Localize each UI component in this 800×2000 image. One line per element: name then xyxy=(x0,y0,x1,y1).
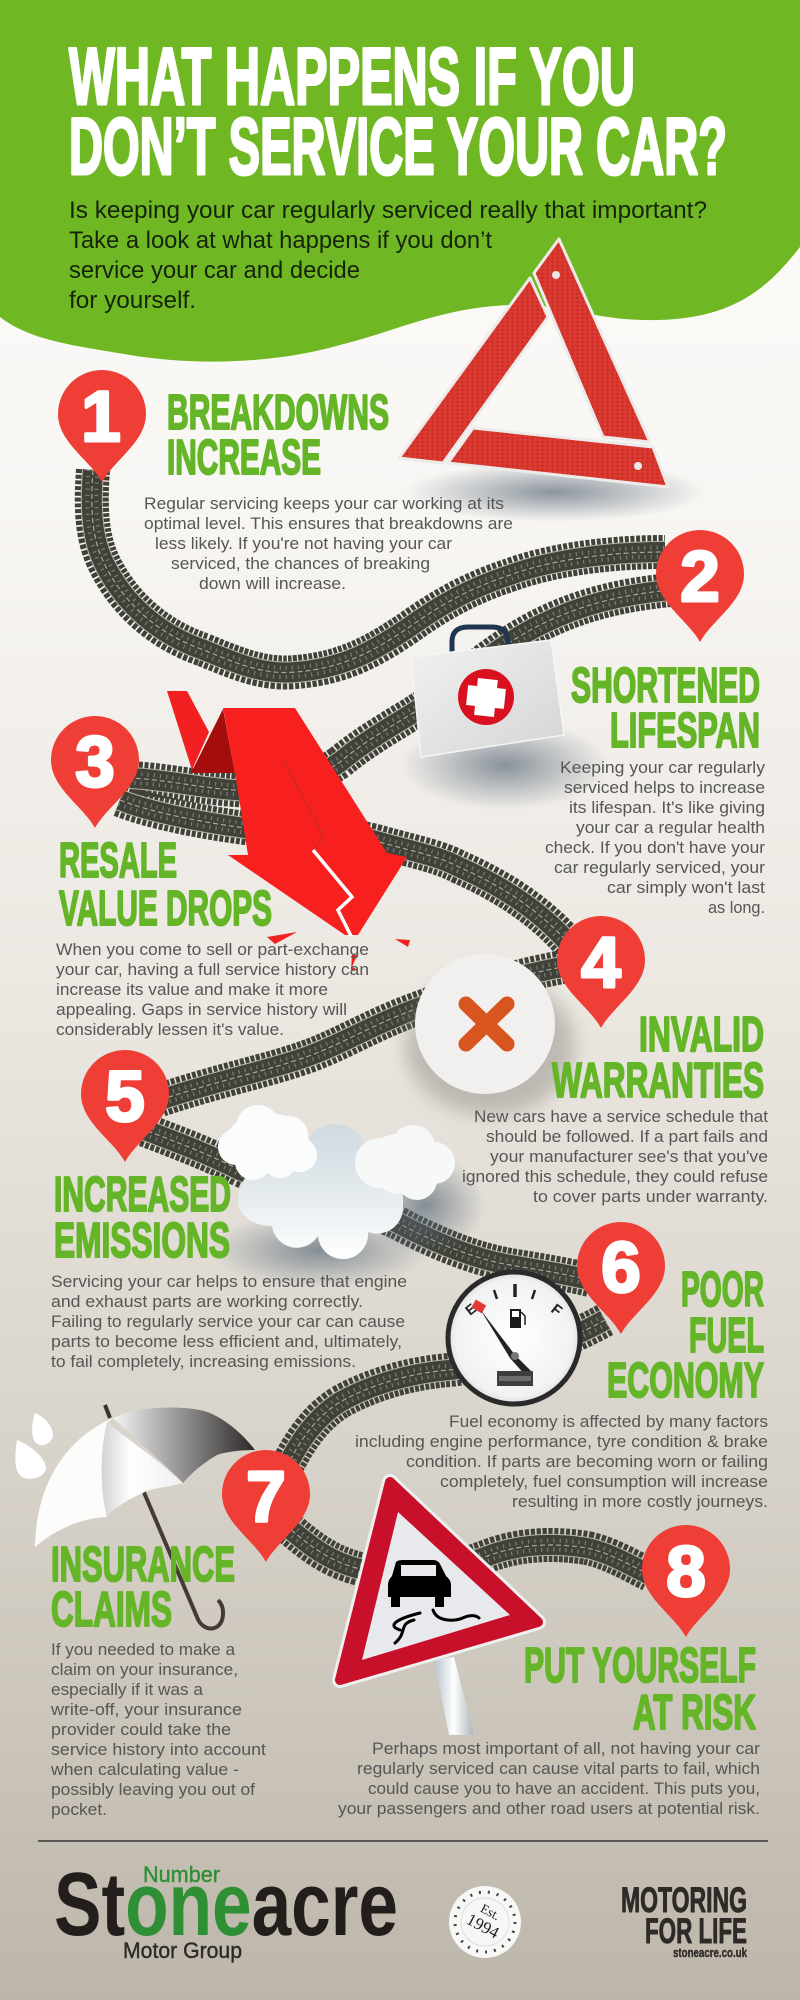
pin 4 xyxy=(557,916,645,1028)
text 4: to cover parts under warranty. xyxy=(533,1187,768,1206)
text 6: Fuel economy is affected by many factors xyxy=(449,1412,768,1431)
icon: umbrella xyxy=(15,1405,255,1628)
icon: first aid case xyxy=(400,627,610,810)
heading 3: VALUE DROPS xyxy=(59,882,272,936)
text 3: appealing. Gaps in service history will xyxy=(56,1000,347,1019)
heading 1: INCREASE xyxy=(167,431,321,485)
pin 5: 5 xyxy=(105,1058,145,1137)
text 7: service history into account xyxy=(51,1740,266,1759)
text 3 xyxy=(56,940,369,1039)
footer divider xyxy=(38,1840,768,1842)
heading 6 xyxy=(607,1263,764,1408)
pin 3 xyxy=(51,716,139,828)
logo: motoring for life: FOR LIFE xyxy=(645,1912,747,1951)
text 5: Servicing your car helps to ensure that engine xyxy=(51,1272,407,1291)
text 8 xyxy=(338,1739,760,1818)
text 4 xyxy=(462,1107,768,1206)
intro text: Take a look at what happens if you don’t xyxy=(69,227,492,254)
text 6: resulting in more costly journeys. xyxy=(512,1492,768,1511)
heading 2 xyxy=(571,659,760,758)
logo: Stoneacre Motor Group: Number xyxy=(143,1862,220,1887)
text 6: completely, fuel consumption will increase xyxy=(440,1472,768,1491)
badge: established 1994: Est. xyxy=(478,1901,503,1923)
badge: established 1994: 1994 xyxy=(463,1910,503,1943)
pin 1: 1 xyxy=(81,378,121,457)
text 2: as long. xyxy=(708,898,765,917)
heading 5 xyxy=(54,1168,231,1268)
pin 8 xyxy=(642,1525,730,1637)
pin 5 xyxy=(81,1050,169,1162)
logo: Stoneacre Motor Group: Stoneacre xyxy=(54,1855,398,1955)
intro text: service your car and decide xyxy=(69,257,360,284)
text 3: your car, having a full service history can xyxy=(56,960,369,979)
pin 4: 4 xyxy=(581,924,621,1003)
text 5: and exhaust parts are working correctly. xyxy=(51,1292,363,1311)
text 2: serviced helps to increase xyxy=(564,778,765,797)
text 7: provider could take the xyxy=(51,1720,231,1739)
icon: fuel gauge: F xyxy=(548,1301,565,1320)
pin 3: 3 xyxy=(75,723,115,802)
text 1: serviced, the chances of breaking xyxy=(171,554,430,573)
text 8: Perhaps most important of all, not having your car xyxy=(372,1739,760,1758)
text 1: less likely. If you're not having your car xyxy=(155,534,452,553)
icon: warning triangle xyxy=(399,239,705,522)
logo: motoring for life: stoneacre.co.uk xyxy=(673,1945,748,1960)
text 1: optimal level. This ensures that breakdowns are xyxy=(144,514,513,533)
text 7: when calculating value - xyxy=(50,1760,239,1779)
text 1: Regular servicing keeps your car working at its xyxy=(144,494,504,513)
text 6 xyxy=(355,1412,768,1511)
text 2: your car a regular health xyxy=(576,818,765,837)
text 7: claim on your insurance, xyxy=(51,1660,238,1679)
text 7: pocket. xyxy=(51,1800,107,1819)
text 7: write-off, your insurance xyxy=(50,1700,242,1719)
pin 6: 6 xyxy=(601,1229,641,1308)
text 5 xyxy=(51,1272,407,1371)
text 5: parts to become less efficient and, ultimately, xyxy=(51,1332,402,1351)
logo: motoring for life xyxy=(621,1881,748,1960)
text 1 xyxy=(144,494,513,593)
pin 6 xyxy=(577,1222,665,1334)
heading 1: BREAKDOWNS xyxy=(167,386,389,440)
pin 1 xyxy=(58,370,146,482)
intro text: Is keeping your car regularly serviced really that important? xyxy=(69,197,707,224)
text 8: regularly serviced can cause vital parts to fail, which xyxy=(357,1759,760,1778)
intro text xyxy=(69,197,707,314)
text 7: If you needed to make a xyxy=(51,1640,236,1659)
pin 7 xyxy=(222,1450,310,1562)
text 4: should be followed. If a part fails and xyxy=(486,1127,768,1146)
intro text: for yourself. xyxy=(69,287,196,314)
text 3: When you come to sell or part-exchange xyxy=(56,940,369,959)
text 3: increase its value and make it more xyxy=(56,980,328,999)
text 7 xyxy=(50,1640,266,1819)
text 1: down will increase. xyxy=(199,574,346,593)
badge: established 1994 xyxy=(449,1886,521,1958)
icon: fuel gauge xyxy=(448,1272,580,1404)
logo: Stoneacre Motor Group: Motor Group xyxy=(123,1938,242,1963)
text 2: Keeping your car regularly xyxy=(560,758,766,777)
heading 8 xyxy=(524,1639,756,1740)
text 2: car regularly serviced, your xyxy=(554,858,765,877)
text 2 xyxy=(545,758,766,917)
pin 2: 2 xyxy=(680,538,720,617)
right cloud xyxy=(355,1125,455,1200)
heading 1 xyxy=(167,386,389,485)
heading 7 xyxy=(51,1538,235,1637)
heading 7: CLAIMS xyxy=(51,1583,172,1637)
heading 4 xyxy=(552,1008,764,1108)
heading 7: INSURANCE xyxy=(51,1538,235,1592)
text 5: to fail completely, increasing emissions. xyxy=(51,1352,356,1371)
text 8: your passengers and other road users at potential risk. xyxy=(338,1799,760,1818)
text 2: check. If you don't have your xyxy=(545,838,765,857)
pin 2 xyxy=(656,530,744,642)
heading 5: INCREASED xyxy=(54,1168,231,1222)
green header panel xyxy=(0,0,800,362)
text 7: especially if it was a xyxy=(51,1680,204,1699)
tyre tracks road xyxy=(92,470,670,1575)
pin 7: 7 xyxy=(246,1458,286,1537)
text 6: including engine performance, tyre condition & brake xyxy=(355,1432,768,1451)
middle cloud xyxy=(238,1124,403,1259)
icon: clouds xyxy=(210,1105,485,1288)
title xyxy=(69,32,727,192)
text 4: ignored this schedule, they could refuse xyxy=(462,1167,768,1186)
icon: fuel gauge: E xyxy=(462,1300,479,1318)
text 4: your manufacturer see's that you've xyxy=(490,1147,768,1166)
icon: slippery road sign xyxy=(340,1482,538,1735)
heading 5: EMISSIONS xyxy=(54,1214,230,1268)
heading 3 xyxy=(59,834,272,936)
icon: x circle xyxy=(405,954,575,1115)
text 6: condition. If parts are becoming worn or failing xyxy=(406,1452,768,1471)
text 8: could cause you to have an accident. This puts you, xyxy=(368,1779,760,1798)
text 2: car simply won't last xyxy=(607,878,765,897)
text 5: Failing to regularly service your car can cause xyxy=(51,1312,405,1331)
text 7: possibly leaving you out of xyxy=(51,1780,255,1799)
heading 3: RESALE xyxy=(59,834,177,888)
text 3: considerably lessen it's value. xyxy=(56,1020,284,1039)
left cloud xyxy=(218,1105,317,1180)
icon: falling arrow xyxy=(167,691,410,970)
pin 8: 8 xyxy=(666,1533,706,1612)
text 2: its lifespan. It's like giving xyxy=(569,798,765,817)
text 4: New cars have a service schedule that xyxy=(474,1107,768,1126)
